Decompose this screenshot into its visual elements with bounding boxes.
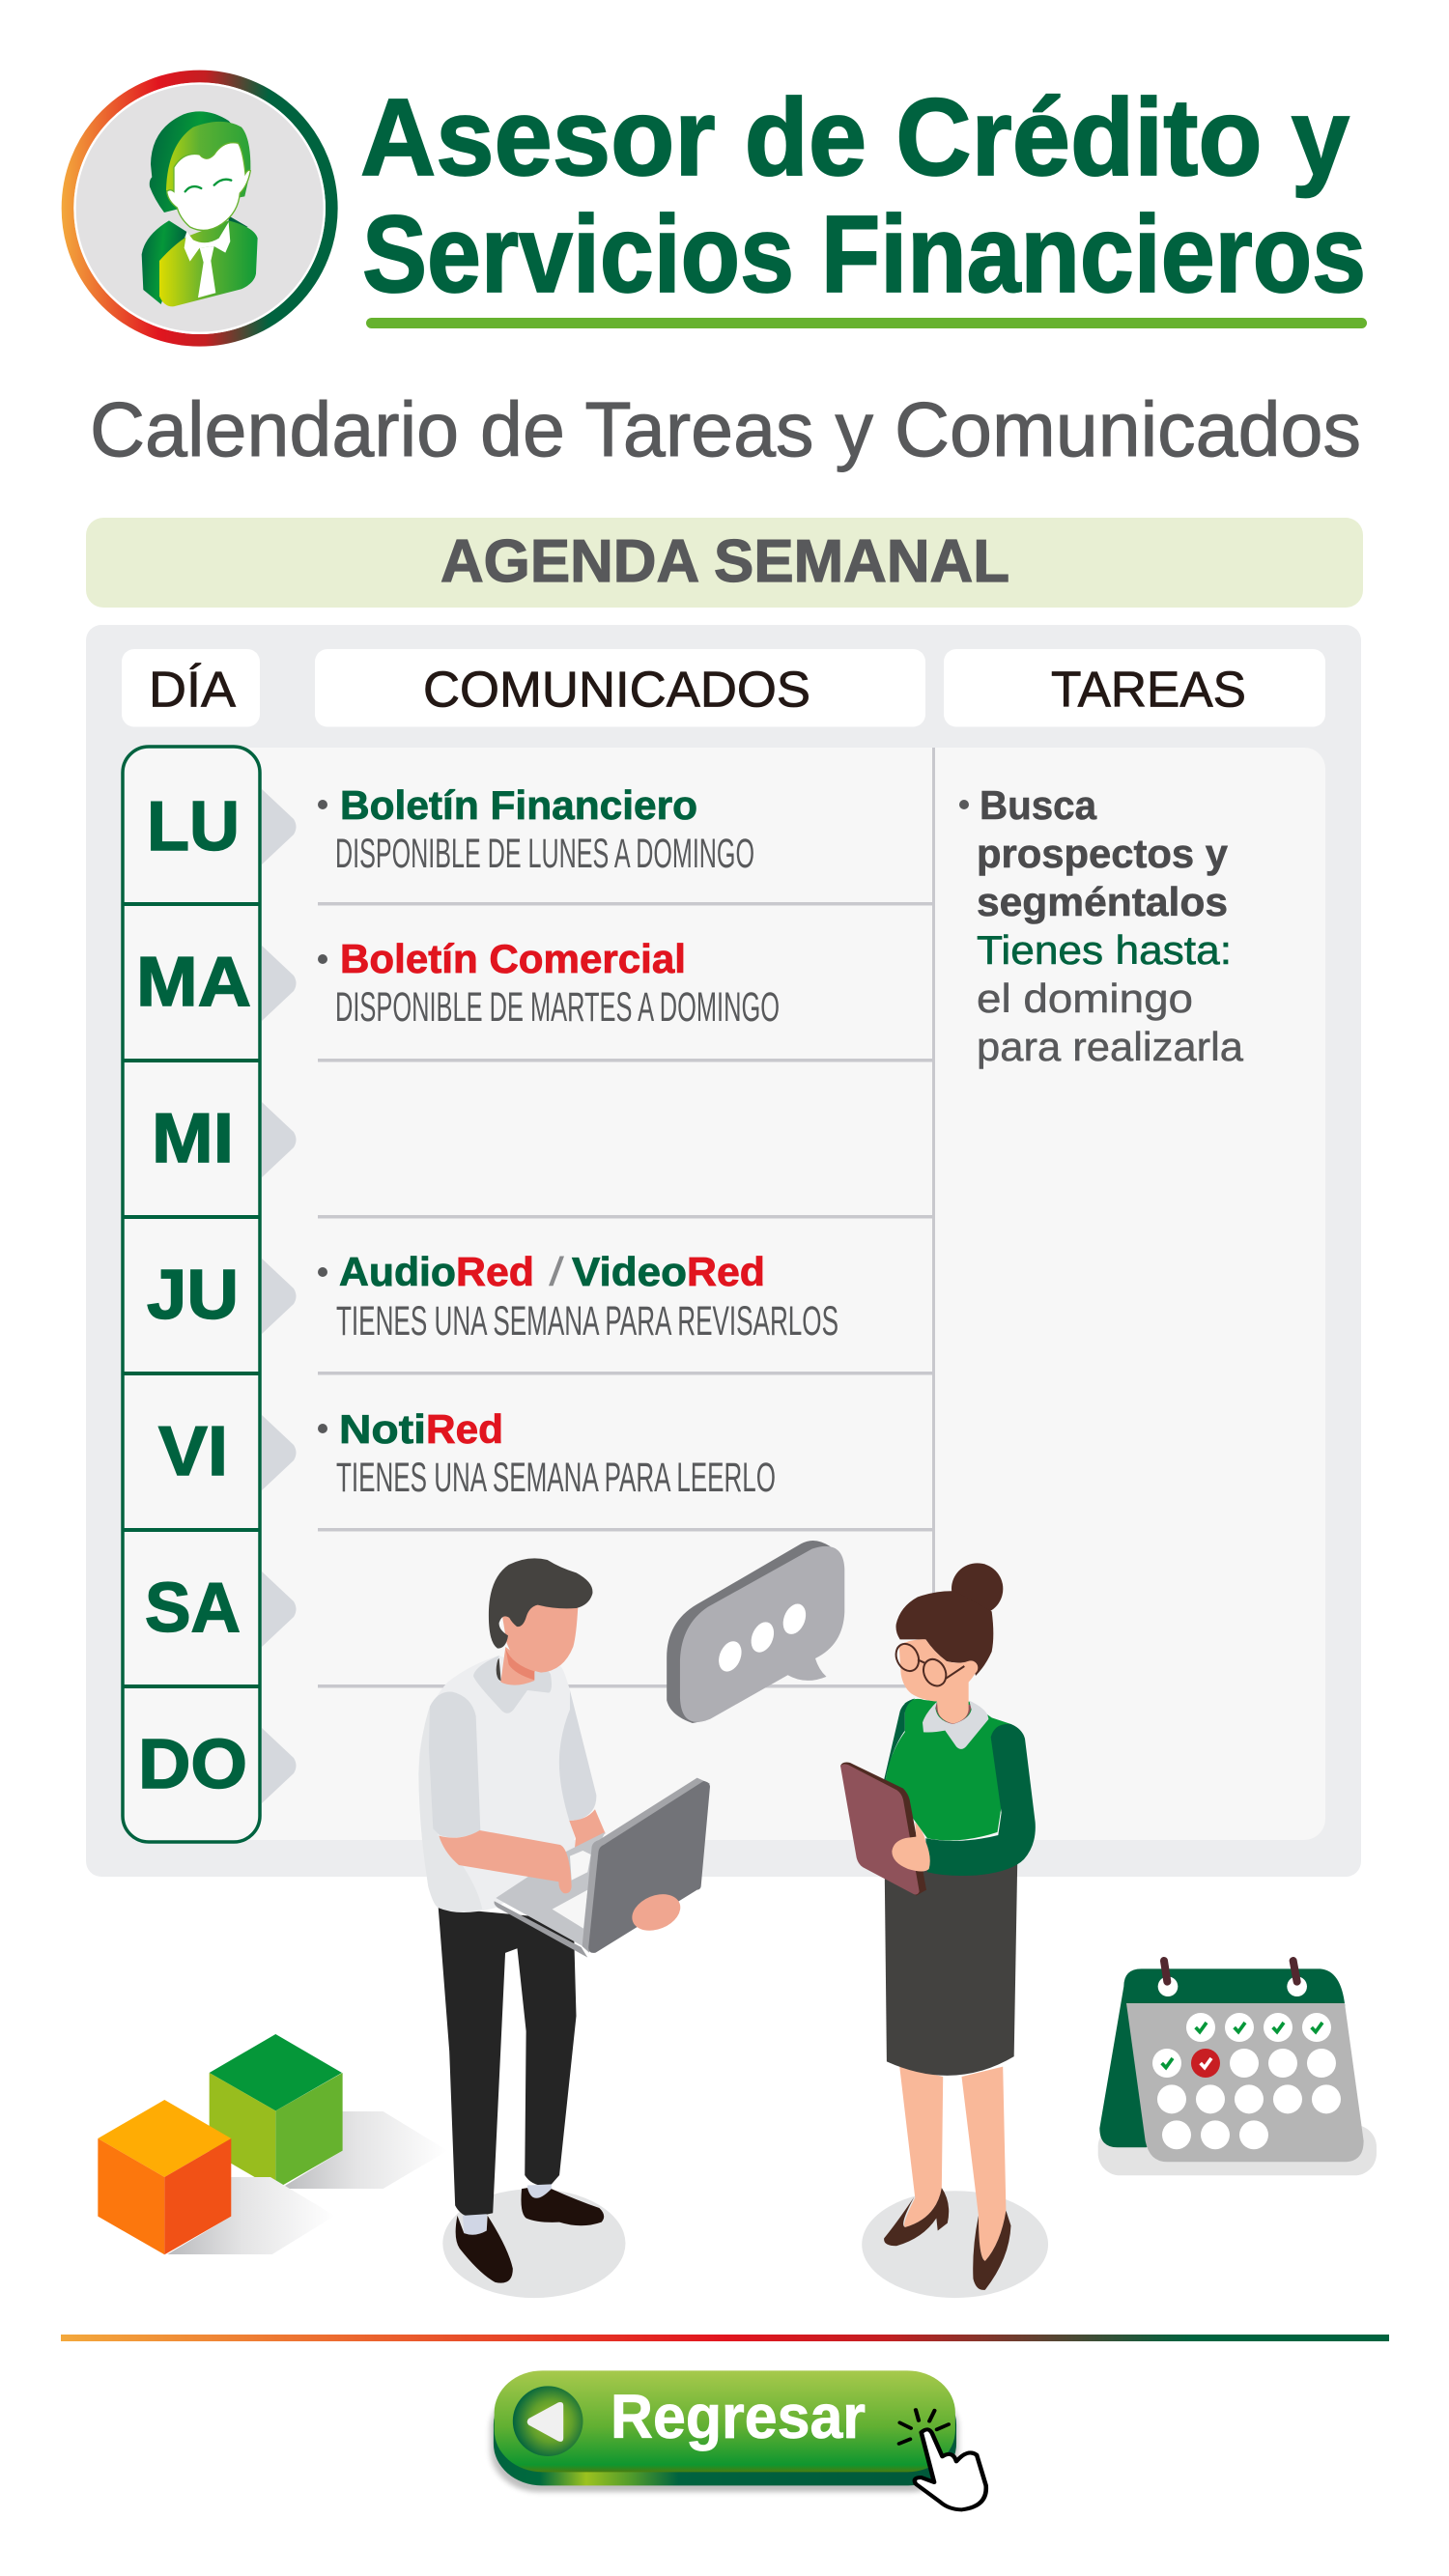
- icon: advisor avatar badge: [68, 76, 331, 340]
- title: [360, 76, 1366, 315]
- comunicado: notired: Red: [426, 1406, 503, 1452]
- illustration: woman with folder: [840, 1563, 1048, 2298]
- comunicado: boletín financiero: DISPONIBLE DE LUNES A DOMINGO: [335, 831, 754, 877]
- illustration: man with laptop: [418, 1558, 710, 2298]
- icon: isometric cubes: [98, 2034, 447, 2254]
- button label: Regresar: [611, 2382, 866, 2451]
- button back icon: [513, 2386, 583, 2456]
- day: lunes: LU: [147, 788, 240, 865]
- title line 1: Asesor de Crédito y: [360, 76, 1350, 198]
- tarea: busca prospectos: Busca: [980, 782, 1097, 828]
- comunicado: boletín financiero: Boletín Financiero: [340, 782, 697, 828]
- day: domingo: DO: [138, 1726, 247, 1803]
- header: comunicados: [315, 649, 925, 726]
- day column: [122, 747, 261, 1842]
- day: martes: MA: [136, 944, 251, 1021]
- icon: pointing hand: [899, 2410, 986, 2509]
- day arrows: [262, 789, 296, 1803]
- comunicado: boletín financiero: [318, 782, 754, 877]
- agenda heading text: AGENDA SEMANAL: [440, 528, 1009, 595]
- tarea: busca prospectos: segméntalos: [977, 879, 1228, 924]
- comunicado: boletín comercial: [318, 936, 780, 1031]
- title underline: [366, 318, 1367, 328]
- comunicado: audiored y videored: Video: [572, 1249, 687, 1294]
- inner table panel: [193, 748, 1325, 1840]
- tarea: busca prospectos: [959, 782, 1244, 1069]
- comunicado: audiored y videored: Audio: [339, 1249, 456, 1294]
- subtitle: Calendario de Tareas y Comunicados: [90, 386, 1361, 472]
- agenda heading band: [86, 518, 1363, 608]
- comunicado: notired: [318, 1406, 776, 1501]
- comunicado: audiored y videored: Red: [456, 1249, 534, 1294]
- header: comunicados: COMUNICADOS: [423, 663, 810, 719]
- comunicado: audiored y videored: TIENES UNA SEMANA PARA REVISARLOS: [336, 1298, 838, 1345]
- tarea: busca prospectos: para realizarla: [977, 1024, 1244, 1069]
- day: sábado: SA: [145, 1570, 241, 1647]
- comunicado: notired: Noti: [339, 1406, 426, 1452]
- comunicado: audiored y videored: /: [549, 1249, 564, 1294]
- tarea: busca prospectos: prospectos y: [977, 831, 1229, 876]
- header: día: [122, 649, 260, 726]
- tarea: busca prospectos: Tienes hasta:: [977, 927, 1232, 973]
- comunicado: boletín comercial: DISPONIBLE DE MARTES A DOMINGO: [335, 984, 780, 1031]
- tarea: busca prospectos: el domingo: [977, 976, 1193, 1021]
- icon: speech bubble: [667, 1541, 844, 1723]
- day: jueves: JU: [147, 1257, 239, 1334]
- comunicado: boletín comercial: Boletín Comercial: [340, 936, 686, 981]
- panel: weekly agenda table: [86, 625, 1361, 1877]
- button: regresar: [491, 2370, 986, 2509]
- day: miércoles: MI: [152, 1100, 234, 1177]
- header: día: DÍA: [149, 663, 236, 719]
- bottom gradient divider line: [61, 2335, 1389, 2341]
- comunicado: notired: TIENES UNA SEMANA PARA LEERLO: [336, 1455, 776, 1501]
- icon: calendar: [1098, 1961, 1377, 2175]
- comunicado: audiored y videored: [318, 1249, 838, 1345]
- day: viernes: VI: [158, 1413, 228, 1490]
- comunicado: audiored y videored: Red: [687, 1249, 765, 1294]
- header: tareas: TAREAS: [1051, 663, 1246, 719]
- header: tareas: [944, 649, 1325, 726]
